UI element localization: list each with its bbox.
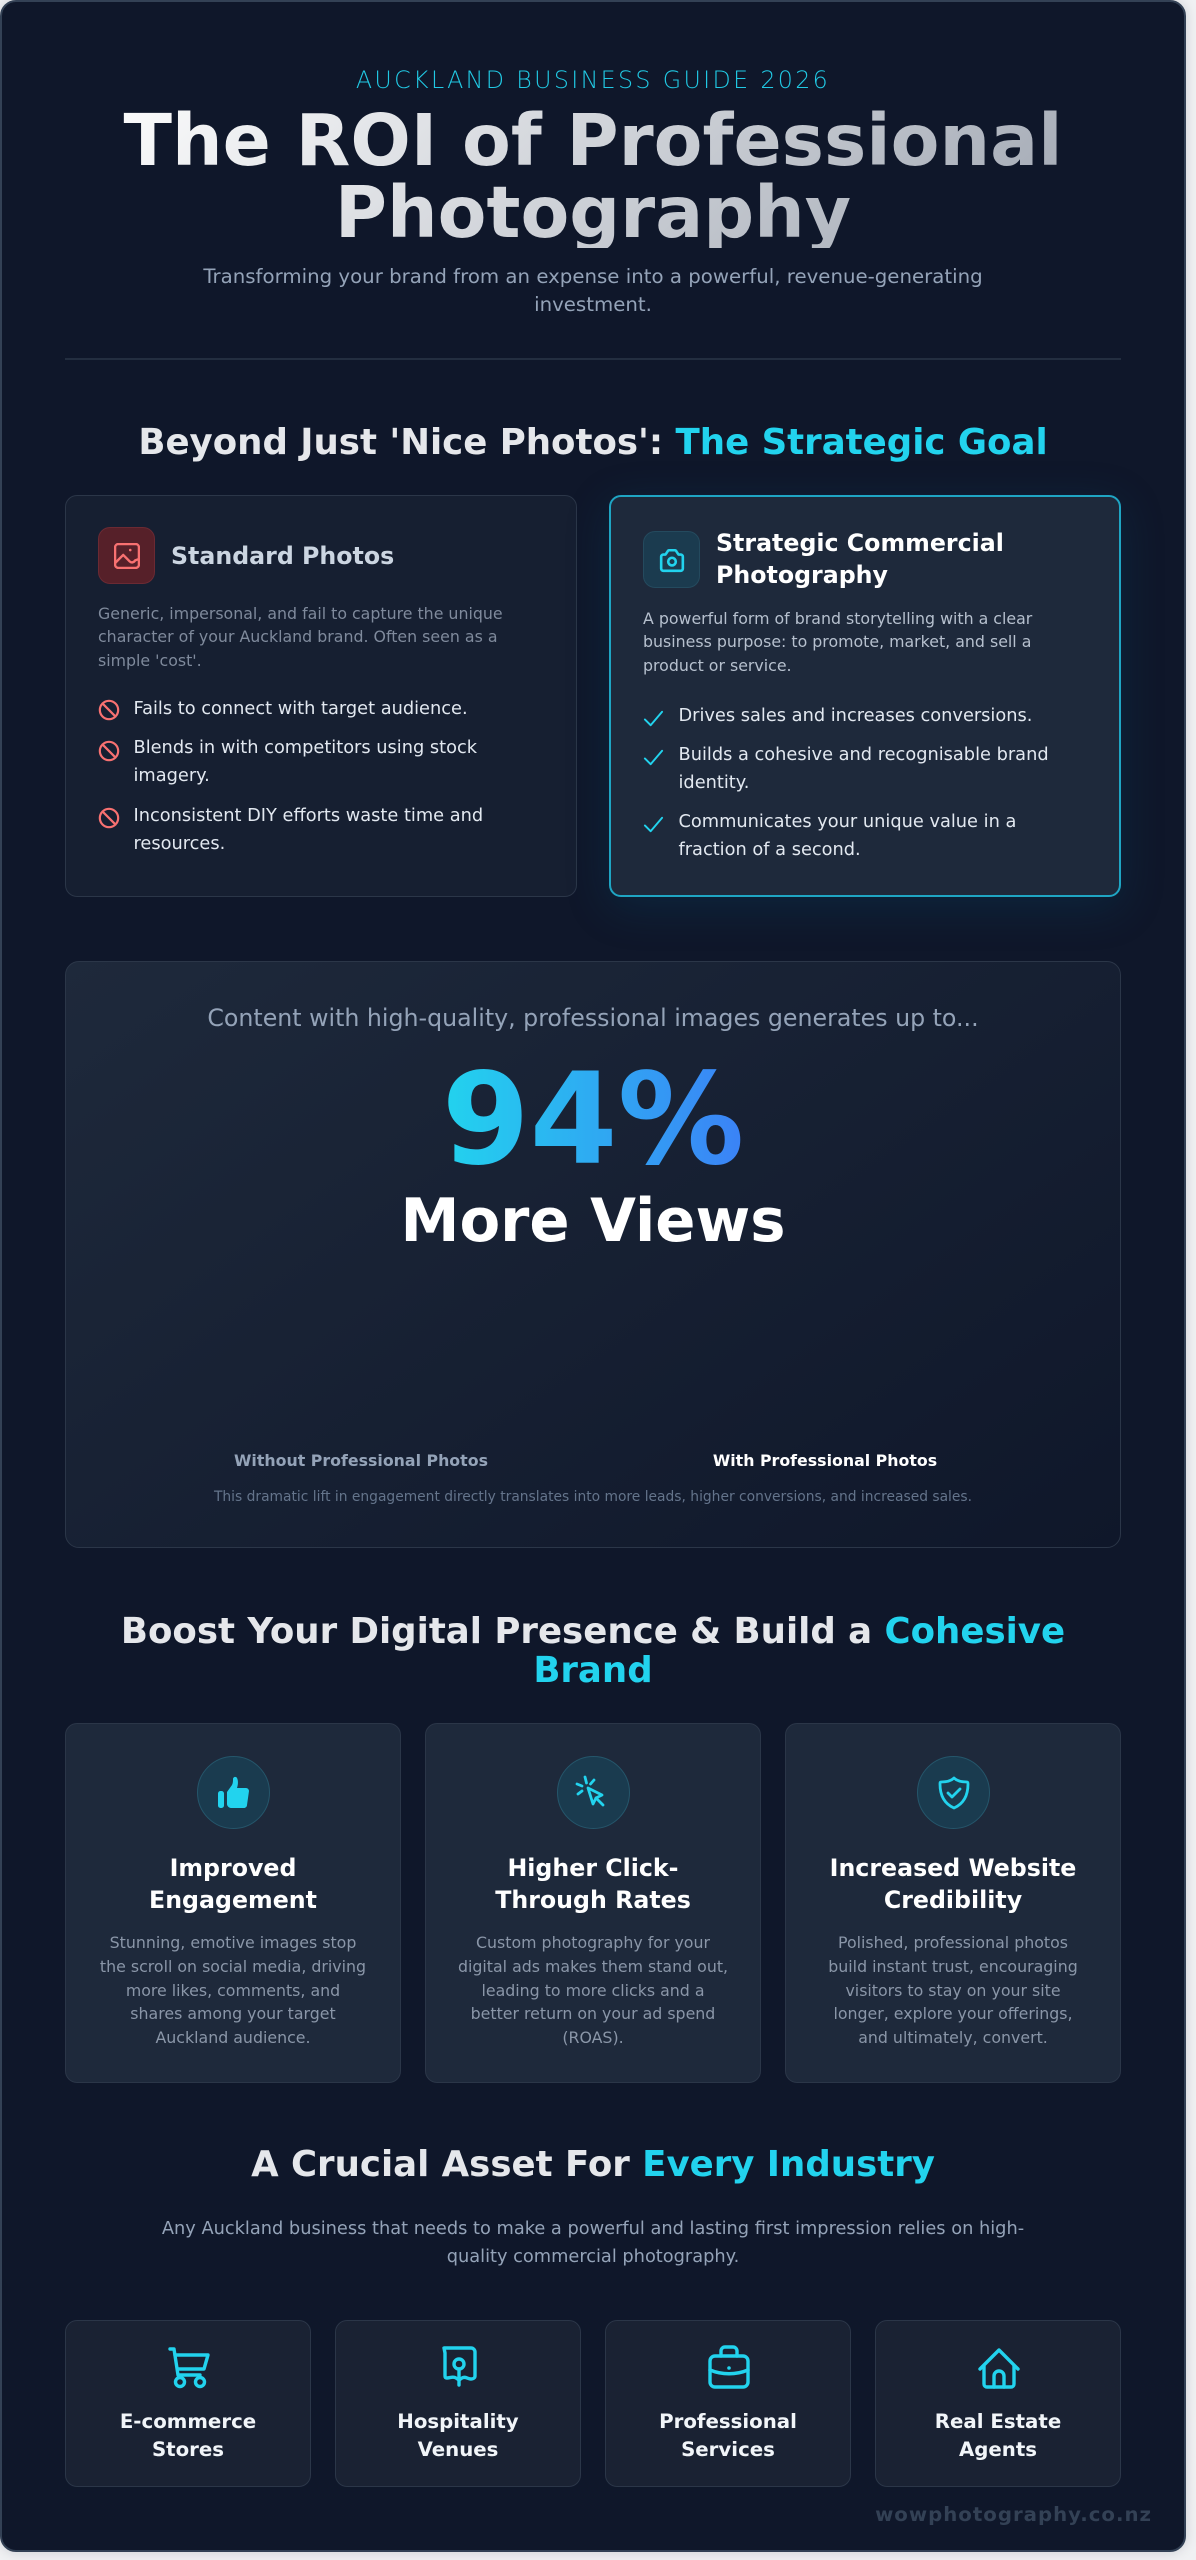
card text: longer, explore your offerings,: [833, 2004, 1073, 2023]
item 2: Builds a cohesive and recognisable brand: [678, 744, 1049, 764]
heading: every industry: A Crucial Asset For Every Industry: [251, 2144, 935, 2185]
chart label: without: Without Professional Photos: [234, 1450, 488, 1470]
card title: Engagement: [149, 1886, 317, 1914]
description: product or service.: [643, 656, 792, 675]
icon: no symbol: [98, 808, 120, 828]
label: Professional: [659, 2410, 797, 2433]
divider: [65, 358, 1121, 360]
item 3: resources.: [134, 832, 225, 854]
panel: 94% stat: [65, 961, 1121, 1548]
icon: shield check: [917, 1756, 990, 1829]
subtitle: investment.: [534, 292, 652, 316]
card text: [100, 1933, 366, 2047]
card: click-through: [425, 1723, 761, 2083]
heading: Photography: [716, 561, 888, 589]
card title: Improved: [170, 1854, 296, 1882]
section text: quality commercial photography.: [447, 2246, 739, 2267]
label: Services: [681, 2438, 775, 2461]
card text: shares among your target: [130, 2004, 336, 2023]
stat label: More Views: [400, 1186, 786, 1255]
card text: [828, 1933, 1078, 2047]
list: [98, 698, 483, 854]
card: real estate: [875, 2320, 1121, 2487]
label: E-commerce: [120, 2410, 256, 2433]
card text: more likes, comments, and: [126, 1981, 340, 2000]
description: Generic, impersonal, and fail to capture the unique: [98, 604, 503, 622]
icon: venue: [442, 2346, 477, 2387]
description: [643, 608, 1032, 675]
heading: digital presence: Brand: [533, 1650, 653, 1691]
section text: Any Auckland business that needs to make a powerful and lasting first impression relies on high-: [162, 2218, 1024, 2239]
subtitle: [203, 264, 983, 316]
card: e-commerce: [65, 2320, 311, 2487]
card text: Stunning, emotive images stop: [110, 1933, 356, 1952]
card title: [830, 1854, 1076, 1914]
panel: strategic commercial photography: [609, 495, 1121, 897]
icon: check: [644, 710, 664, 726]
item 2: [134, 736, 477, 786]
card text: visitors to stay on your site: [845, 1981, 1061, 2000]
icon: cart: [168, 2347, 210, 2388]
icon: check: [644, 750, 664, 766]
card text: (ROAS).: [562, 2028, 624, 2047]
card title: [495, 1854, 691, 1914]
card text: Polished, professional photos: [838, 1933, 1068, 1952]
item 3: [678, 811, 1016, 860]
card title: Through Rates: [495, 1886, 691, 1914]
label: Real Estate: [935, 2410, 1061, 2433]
panel: 94% stat: 94%: [442, 1046, 744, 1192]
title: [65, 105, 1121, 248]
watermark: wowphotography.co.nz: [875, 2503, 1152, 2526]
caption: This dramatic lift in engagement directly translates into more leads, higher conversions, and increased sales.: [214, 1489, 972, 1505]
label: [659, 2410, 797, 2461]
icon: cursor click: [557, 1756, 630, 1829]
title: Photography: [335, 170, 851, 254]
label: [397, 2410, 519, 2461]
list: [644, 704, 1049, 860]
section text: [162, 2218, 1024, 2267]
title: The ROI of Professional: [124, 99, 1062, 182]
label: Hospitality: [397, 2410, 519, 2433]
card title: Higher Click-: [507, 1854, 678, 1882]
item 2: imagery.: [134, 764, 210, 786]
card text: Custom photography for your: [476, 1933, 710, 1952]
heading: digital presence: Boost Your Digital Presence & Build a Cohesive: [121, 1610, 1065, 1652]
description: character of your Auckland brand. Often seen as a: [98, 627, 498, 646]
description: simple 'cost'.: [98, 651, 202, 670]
card: professional services: [605, 2320, 851, 2487]
icon: no symbol: [98, 700, 120, 720]
label: Venues: [418, 2438, 498, 2461]
label: Stores: [152, 2438, 224, 2461]
card text: [458, 1933, 728, 2047]
chart label: with: With Professional Photos: [713, 1450, 937, 1470]
icon: image: [98, 527, 155, 584]
item 3: fraction of a second.: [678, 839, 861, 860]
item 2: [678, 744, 1049, 792]
card text: leading to more clicks and a: [481, 1981, 705, 2000]
subtitle: Transforming your brand from an expense into a powerful, revenue-generating: [203, 264, 983, 288]
icon: briefcase: [708, 2345, 750, 2389]
icon: check: [644, 816, 664, 832]
icon: thumbs up: [197, 1756, 270, 1829]
item 3: Communicates your unique value in a: [678, 811, 1016, 832]
card: improved engagement: [65, 1723, 401, 2083]
item 2: identity.: [678, 772, 749, 792]
card text: Auckland audience.: [155, 2028, 311, 2047]
card: hospitality: [335, 2320, 581, 2487]
heading: strategic goal: Beyond Just 'Nice Photos': The Strategic Goal: [138, 422, 1048, 462]
card title: Increased Website: [830, 1854, 1076, 1882]
item 1: Fails to connect with target audience.: [134, 698, 468, 718]
label: Agents: [959, 2438, 1037, 2461]
heading: [716, 529, 1004, 589]
label: [120, 2410, 256, 2461]
item 2: Blends in with competitors using stock: [134, 736, 477, 758]
card title: Credibility: [884, 1886, 1022, 1914]
label: [935, 2410, 1061, 2461]
eyebrow: AUCKLAND BUSINESS GUIDE 2026: [356, 66, 830, 94]
item 3: [134, 804, 483, 854]
icon: house: [978, 2348, 1020, 2389]
card title: [149, 1854, 317, 1914]
card: credibility: [785, 1723, 1121, 2083]
description: A powerful form of brand storytelling with a clear: [643, 608, 1032, 628]
card text: digital ads makes them stand out,: [458, 1957, 728, 1976]
item 1: Drives sales and increases conversions.: [678, 704, 1032, 726]
heading: Standard Photos: [171, 542, 394, 570]
card text: better return on your ad spend: [471, 2004, 715, 2023]
icon: camera: [643, 531, 700, 588]
description: [98, 604, 503, 670]
description: business purpose: to promote, market, and sell a: [643, 632, 1031, 651]
icon: no symbol: [98, 740, 120, 762]
card text: and ultimately, convert.: [858, 2028, 1048, 2047]
card text: the scroll on social media, driving: [100, 1957, 366, 1976]
heading: digital presence: [121, 1610, 1065, 1691]
heading: Strategic Commercial: [716, 529, 1004, 557]
item 3: Inconsistent DIY efforts waste time and: [134, 804, 483, 826]
panel: standard photos: [65, 495, 577, 897]
card text: build instant trust, encouraging: [828, 1957, 1078, 1976]
stat intro: Content with high-quality, professional images generates up to...: [207, 1004, 979, 1032]
